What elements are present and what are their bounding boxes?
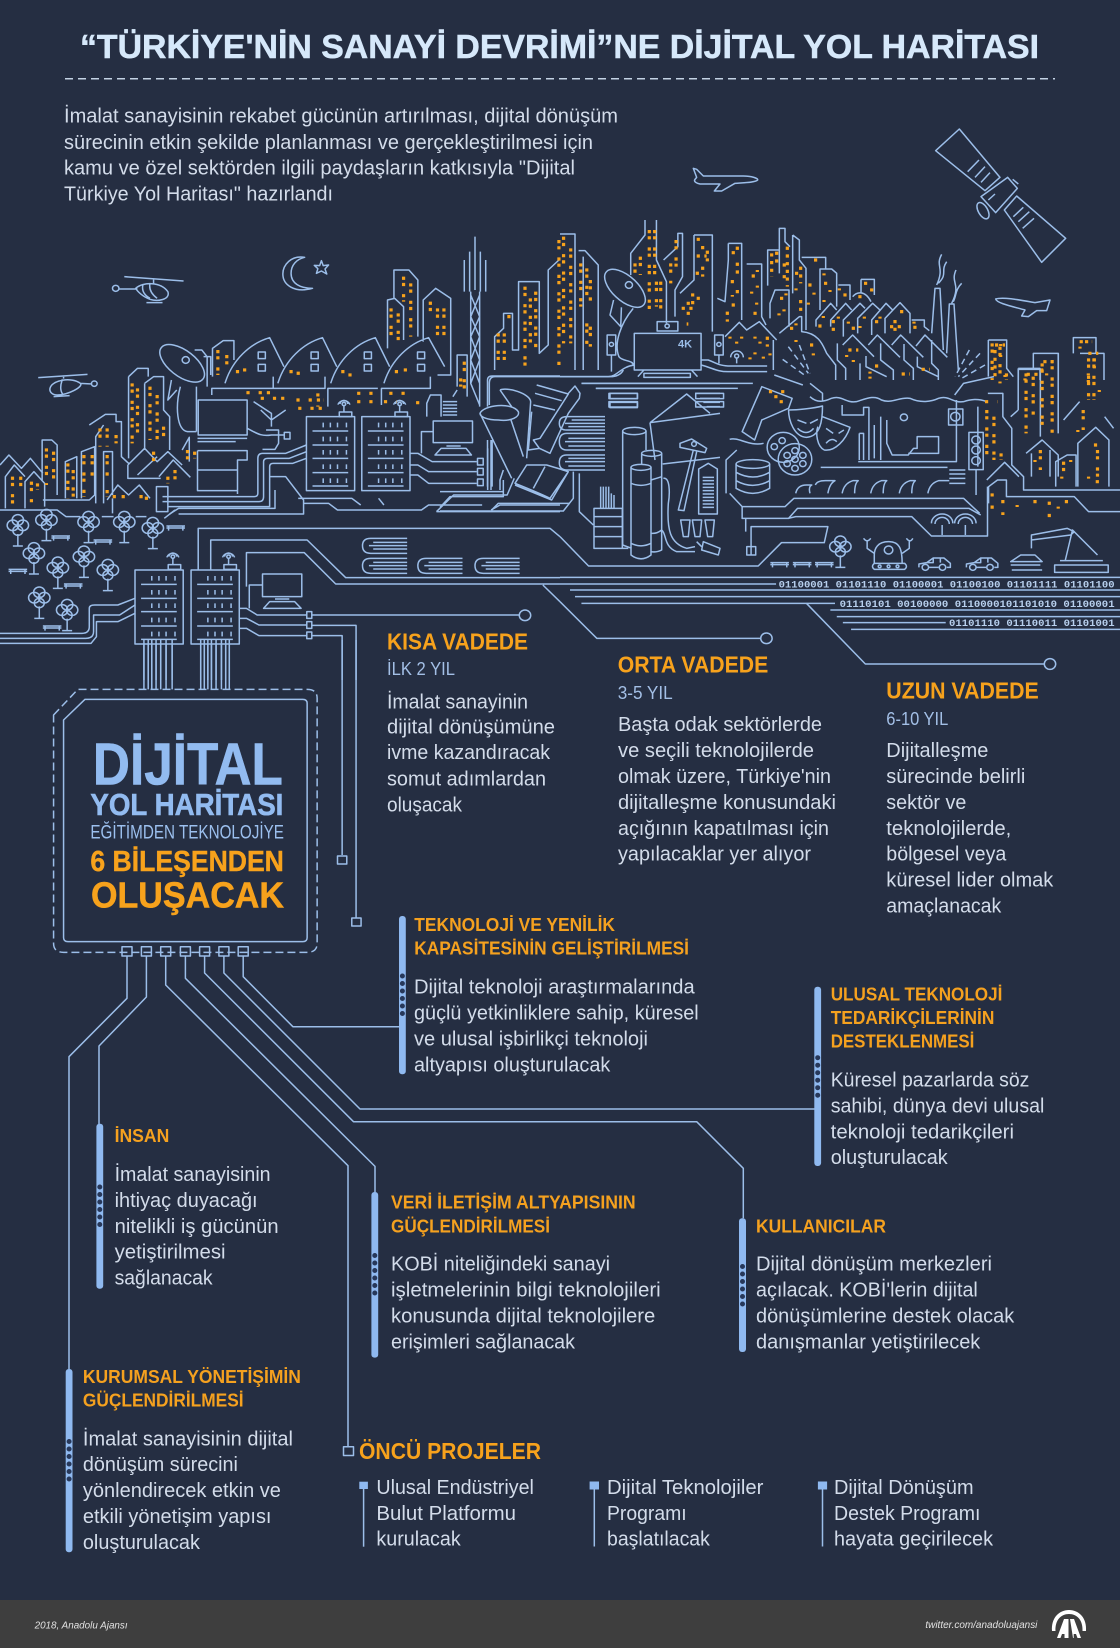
orta vadede block: 3-5 YIL <box>618 683 673 703</box>
uzun vadede block: UZUN VADEDE <box>886 677 1039 703</box>
panel: veri iletişim altyapısı <box>371 1192 661 1358</box>
icon: helicopter one <box>112 277 184 303</box>
scattered windows right lower <box>769 342 1105 518</box>
text: 4K label: 4K <box>678 339 692 351</box>
kısa vadede block: dijital dönüşümüne <box>387 716 555 738</box>
board wiring <box>440 370 720 525</box>
project: ulusal endüstriyel bulut: kurulacak <box>376 1529 462 1551</box>
icon: film reels <box>767 432 812 475</box>
stage and seats <box>726 400 981 518</box>
project: ulusal endüstriyel bulut <box>359 1477 534 1551</box>
panel: ulusal teknoloji tedarikçileri: oluşturulacak <box>831 1147 949 1169</box>
orta vadede block: olmak üzere, Türkiye'nin <box>618 766 831 788</box>
right side scene and binary data lines <box>560 220 1120 669</box>
server racks lower <box>135 570 183 644</box>
ground trace <box>0 510 175 518</box>
panel: insan: İmalat sanayisinin <box>115 1163 271 1186</box>
panel: insan: yetiştirilmesi <box>115 1242 226 1264</box>
chip panel: 6 BİLEŞENDEN <box>90 846 284 878</box>
chip panel: YOL HARİTASI <box>90 787 283 822</box>
uzun vadede block: amaçlanacak <box>886 896 1002 918</box>
kısa vadede terminal <box>519 610 531 621</box>
chip feed wires <box>144 644 229 680</box>
project: dijital teknolojiler <box>590 1477 764 1550</box>
kısa vadede block: oluşacak <box>387 795 463 817</box>
uzun vadede block: Dijitalleşme <box>886 740 988 762</box>
project: ulusal endüstriyel bulut: Bulut Platformu <box>376 1503 516 1525</box>
stage light rays <box>783 345 985 378</box>
panel: kullanıcılar: dönüşümlerine destek olacak <box>756 1306 1015 1328</box>
panel: insan: nitelikli iş gücünün <box>115 1216 279 1238</box>
icon: paper pages <box>528 385 580 453</box>
orta vadede trace <box>560 602 761 638</box>
icon: radio tower <box>464 237 486 407</box>
icon: cylinders <box>623 427 662 559</box>
uzun vadede block: bölgesel veya <box>886 844 1007 866</box>
intro text <box>64 105 618 206</box>
binary text rows: 01110101 00100000 0110000101101010 01100001 <box>840 599 1115 611</box>
panel: kullanıcılar: Dijital dönüşüm merkezleri <box>756 1254 992 1276</box>
footer bar <box>0 1600 1120 1648</box>
icon: tree <box>830 536 851 567</box>
icon: monitor lower <box>249 574 302 608</box>
icon: wifi pair <box>746 487 987 536</box>
icon: cups and tag <box>662 478 720 555</box>
square connectors <box>284 432 483 486</box>
project: dijital dönüşüm destek: Destek Programı <box>834 1503 980 1525</box>
project: dijital dönüşüm destek: Dijital Dönüşüm <box>834 1477 974 1499</box>
skyline outlines left <box>0 260 559 513</box>
panel: ulusal teknoloji tedarikçileri: sahibi, dünya devi ulusal <box>831 1096 1044 1118</box>
panel: veri iletişim altyapısı: KOBİ niteliğindeki sanayi <box>391 1253 610 1276</box>
binary text rows <box>779 579 1115 630</box>
icon: theatre masks <box>789 406 850 450</box>
uzun vadede block: 6-10 YIL <box>886 709 948 729</box>
icon: book and pens stack <box>594 487 628 548</box>
icon: agency logo <box>1052 1610 1086 1638</box>
skyline right outlines <box>978 353 1120 512</box>
icon: cars <box>919 558 998 570</box>
kısa vadede block: KISA VADEDE <box>387 628 528 654</box>
icon: robot <box>864 538 913 569</box>
skyline windows right lower <box>564 230 1097 477</box>
uzun vadede block: sektör ve <box>886 792 966 814</box>
panel: kurumsal yönetişim: etkili yönetişim yapısı <box>83 1506 272 1528</box>
uzun vadede trace <box>806 603 1044 664</box>
icon: T-square <box>678 439 707 511</box>
panel: kurumsal yönetişim: oluşturulacak <box>83 1532 201 1554</box>
panel: kurumsal yönetişim: KURUMSAL YÖNETİŞİMİN <box>83 1367 301 1387</box>
panel: kurumsal yönetişim: GÜÇLENDİRİLMESİ <box>83 1390 244 1410</box>
skyline windows right <box>682 239 1098 382</box>
icon: stacked books <box>559 417 605 470</box>
project: dijital dönüşüm destek <box>818 1477 994 1550</box>
intro text: İmalat sanayisinin rekabet gücünün artırılması, dijital dönüşüm <box>64 105 618 128</box>
panel: kurumsal yönetişim: İmalat sanayisinin dijital <box>83 1427 293 1450</box>
title: “TÜRKİYE'NİN SANAYİ DEVRİMİ”NE DİJİTAL YOL HARİTASI <box>80 28 1039 65</box>
icon: speakers <box>607 324 723 372</box>
scattered windows left <box>114 368 423 507</box>
chip panel: OLUŞACAK <box>91 875 284 916</box>
orta vadede block: Başta odak sektörlerde <box>618 714 822 736</box>
orta vadede block: açığının kapatılması için <box>618 818 829 840</box>
binary text rows: 01100001 01101110 01100001 01100100 01101111 01101100 <box>779 579 1115 591</box>
icon: satellite dish right <box>598 263 652 365</box>
chip panel: EĞİTİMDEN TEKNOLOJİYE <box>90 820 284 843</box>
computer block and plant <box>197 400 286 494</box>
panel: veri iletişim altyapısı: konusunda dijital teknolojilere <box>391 1306 655 1328</box>
panel: kullanıcılar <box>739 1217 1015 1353</box>
footer link: twitter.com/anadoluajansi <box>925 1620 1038 1631</box>
orta vadede block <box>618 651 836 866</box>
panel: teknoloji ve yenilik: ve ulusal işbirlikçi teknoloji <box>414 1028 648 1050</box>
kısa vadede block: İLK 2 YIL <box>387 659 455 679</box>
project: dijital teknolojiler: Programı <box>607 1503 687 1525</box>
icon: antenna <box>731 351 743 363</box>
panel: teknoloji ve yenilik: KAPASİTESİNİN GELİŞTİRİLMESİ <box>414 938 689 958</box>
lower connector <box>560 527 828 566</box>
icon: monitor upper <box>421 376 560 487</box>
intro text: sürecinin etkin şekilde planlanması ve gerçekleştirilmesi için <box>64 132 593 154</box>
panel: teknoloji ve yenilik: altyapısı oluşturulacak <box>414 1054 611 1076</box>
panel: veri iletişim altyapısı: GÜÇLENDİRİLMESİ <box>391 1216 550 1236</box>
chip panel <box>54 640 361 952</box>
kısa vadede block: somut adımlardan <box>387 769 546 791</box>
icon: crescent moon and star <box>283 257 329 290</box>
tv wires <box>560 360 994 407</box>
project: dijital dönüşüm destek: hayata geçirilecek <box>834 1528 994 1550</box>
server racks upper <box>306 417 355 491</box>
icon: books row <box>362 538 520 573</box>
icon: factory chimneys <box>932 254 962 370</box>
intro text: kamu ve özel sektörden ilgili paydaşların katkısıyla "Dijital <box>64 158 575 180</box>
lower traces <box>198 528 560 602</box>
panel: ulusal teknoloji tedarikçileri <box>814 985 1044 1169</box>
bottom wires from chip <box>69 947 815 1456</box>
connector squares lower <box>307 612 312 639</box>
skyline outlines right <box>680 228 1104 380</box>
skyline outlines middle <box>560 220 682 370</box>
footer credit: 2018, Anadolu Ajansı <box>34 1620 128 1632</box>
icon: blueprint board <box>650 394 720 464</box>
icon: helicopter two <box>38 374 97 397</box>
orta vadede block: ORTA VADEDE <box>618 651 768 677</box>
panel: teknoloji ve yenilik: güçlü yetkinliklere sahip, küresel <box>414 1002 699 1024</box>
icon: rolled scrolls <box>480 389 531 478</box>
icon: airplane one <box>693 168 758 191</box>
panel: ulusal teknoloji tedarikçileri: teknoloji tedarikçileri <box>831 1122 1014 1144</box>
chip outline <box>54 640 361 952</box>
panel: veri iletişim altyapısı: işletmelerinin bilgi teknolojileri <box>391 1280 661 1302</box>
panel: insan: İNSAN <box>115 1126 169 1146</box>
icon: satellite dish left <box>153 338 211 432</box>
uzun vadede terminal <box>1044 659 1056 669</box>
orta vadede block: ve seçili teknolojilerde <box>618 740 814 762</box>
panel: ulusal teknoloji tedarikçileri: Küresel pazarlarda söz <box>831 1070 1029 1092</box>
icon: trees <box>7 509 185 631</box>
kısa vadede block <box>387 628 555 817</box>
uzun vadede block: teknolojilerde, <box>886 818 1011 840</box>
icon: excavator <box>1011 528 1108 572</box>
intro text: Türkiye Yol Haritası" hazırlandı <box>64 184 333 206</box>
uzun vadede block: küresel lider olmak <box>886 870 1054 892</box>
panel: kullanıcılar: açılacak. KOBİ'lerin dijital <box>756 1279 978 1302</box>
icon: barcode tag <box>699 463 717 514</box>
heading: öncü projeler: ÖNCÜ PROJELER <box>359 1438 541 1464</box>
window boxes on roofs <box>258 352 425 371</box>
panel: kurumsal yönetişim <box>66 1367 301 1554</box>
orta vadede block: dijitalleşme konusundaki <box>618 792 836 814</box>
uzun vadede block <box>886 677 1054 918</box>
icon: wifi upper <box>338 400 352 417</box>
panel: insan: sağlanacak <box>115 1268 214 1290</box>
center objects: scrolls, books, cylinders, blueprint <box>440 370 720 559</box>
panel: kullanıcılar: KULLANICILAR <box>756 1217 886 1237</box>
data lines <box>560 577 1120 629</box>
rack wires lower <box>0 598 520 680</box>
panel: ulusal teknoloji tedarikçileri: DESTEKLENMESİ <box>831 1032 974 1052</box>
icon: database <box>736 460 770 493</box>
uzun vadede block: sürecinde belirli <box>886 766 1025 788</box>
panel: insan <box>96 1124 279 1290</box>
icon: popcorn <box>730 387 792 444</box>
rack wires upper <box>156 445 560 514</box>
chip heading: DİJİTAL <box>93 731 283 797</box>
panel: kurumsal yönetişim: yönlendirecek etkin ve <box>83 1480 281 1502</box>
panel: kullanıcılar: danışmanlar yetiştirilecek <box>756 1331 981 1353</box>
icon: traffic light <box>900 409 983 495</box>
kısa vadede block: ivme kazandıracak <box>387 742 551 764</box>
orta vadede terminal <box>761 633 772 644</box>
panel: teknoloji ve yenilik: TEKNOLOJİ VE YENİLİK <box>414 915 615 935</box>
icon: 4K television <box>634 322 701 377</box>
project: dijital teknolojiler: başlatılacak <box>607 1528 711 1550</box>
panel: ulusal teknoloji tedarikçileri: ULUSAL TEKNOLOJİ <box>831 985 1002 1005</box>
icon: benches <box>770 563 834 567</box>
orta vadede block: yapılacaklar yer alıyor <box>618 844 811 866</box>
project: dijital teknolojiler: Dijital Teknolojiler <box>607 1477 764 1499</box>
icon: wifi lower <box>167 553 181 569</box>
icon: airplane two <box>996 298 1050 317</box>
panel: insan: ihtiyaç duyacağı <box>115 1190 258 1212</box>
panel: teknoloji ve yenilik <box>399 915 699 1076</box>
sky objects and right skyline <box>680 129 1104 380</box>
heading divider <box>65 78 1055 80</box>
panel: teknoloji ve yenilik: Dijital teknoloji araştırmalarında <box>414 976 696 998</box>
binary text rows: 01101110 01110011 01101001 <box>949 618 1115 630</box>
project: ulusal endüstriyel bulut: Ulusal Endüstriyel <box>376 1477 534 1499</box>
icon: open book <box>515 465 568 500</box>
panel: ulusal teknoloji tedarikçileri: TEDARİKÇİLERİNİN <box>831 1008 994 1028</box>
skyline left and upper circuit board <box>0 237 560 680</box>
skyline windows left <box>12 240 559 505</box>
icon: satellite <box>936 129 1066 262</box>
panel: kurumsal yönetişim: dönüşüm sürecini <box>83 1454 238 1476</box>
panel: veri iletişim altyapısı: VERİ İLETİŞİM ALTYAPISININ <box>391 1192 636 1212</box>
kısa vadede block: İmalat sanayinin <box>387 690 528 713</box>
panel: veri iletişim altyapısı: erişimleri sağlanacak <box>391 1332 576 1354</box>
